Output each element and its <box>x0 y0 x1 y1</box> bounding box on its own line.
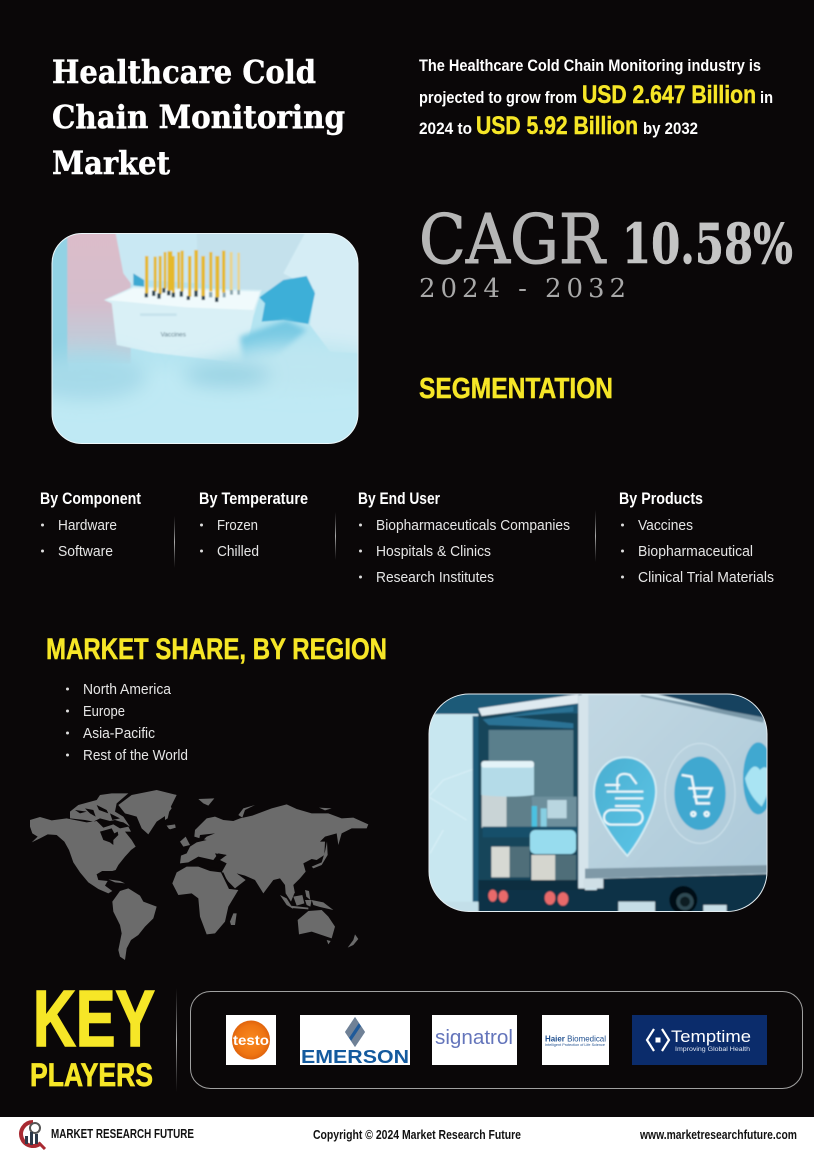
footer logo <box>21 1122 45 1149</box>
heading: key players: PLAYERS <box>30 1057 153 1093</box>
market growth summary text: 2024 to <box>419 119 472 138</box>
segment column: by component: Hardware <box>58 517 117 534</box>
footer bar: MARKET RESEARCH FUTURE <box>51 1127 194 1141</box>
logo: temptime <box>632 1015 767 1065</box>
logo: haier biomedical <box>542 1015 609 1065</box>
market growth summary text: USD 5.92 Billion <box>476 112 638 140</box>
image border: vaccines photo <box>52 234 358 444</box>
heading: segmentation: SEGMENTATION <box>419 373 613 405</box>
segment column: by temperature <box>199 489 308 560</box>
CAGR callout: 2024 - 2032 <box>419 274 626 304</box>
logo: haier biomedical: Intelligent Protection of Life Science <box>545 1043 605 1047</box>
segment column: by products <box>619 489 774 586</box>
segment column: by end user: Research Institutes <box>376 569 494 586</box>
region list: Europe <box>83 703 125 720</box>
heading: market share by region: MARKET SHARE, BY REGION <box>46 633 387 666</box>
segment column: by end user: By End User <box>358 489 440 508</box>
map: americas <box>30 790 177 960</box>
logo: haier biomedical: Haier Biomedical <box>545 1034 606 1044</box>
segment column: by temperature: Frozen <box>217 517 258 534</box>
title <box>52 53 345 182</box>
segment column: by component: By Component <box>40 489 141 508</box>
region list: Asia-Pacific <box>83 725 155 742</box>
logo: signatrol: signatrol <box>435 1027 513 1049</box>
segment column: by temperature: Chilled <box>217 543 259 560</box>
logo: temptime: Improving Global Health <box>675 1046 750 1053</box>
market growth summary text: The Healthcare Cold Chain Monitoring industry is <box>419 56 761 75</box>
segment column: by component <box>40 489 141 560</box>
map: eurasia, africa, oceania <box>165 793 368 948</box>
market growth summary text: in <box>760 88 773 107</box>
logo: emerson <box>300 1015 410 1067</box>
image: refrigerated truck <box>425 690 774 917</box>
segment column: by temperature: By Temperature <box>199 489 308 508</box>
segment column: by end user: Biopharmaceuticals Companies <box>376 517 570 534</box>
title: Healthcare Cold <box>52 53 316 91</box>
world map <box>30 790 368 960</box>
segment column: by products: By Products <box>619 489 703 508</box>
footer bar: Copyright © 2024 Market Research Future <box>313 1128 521 1142</box>
CAGR callout: CAGR <box>419 201 607 280</box>
segment column: by component: Software <box>58 543 113 560</box>
logo: signatrol <box>432 1015 517 1065</box>
segment column: by end user: Hospitals & Clinics <box>376 543 491 560</box>
logo: testo: testo <box>233 1032 269 1048</box>
segment column: by products: Clinical Trial Materials <box>638 569 774 586</box>
footer bar <box>0 1117 814 1150</box>
heading: key players: KEY <box>33 974 155 1063</box>
market growth summary text: USD 2.647 Billion <box>582 81 756 109</box>
image border: truck photo <box>429 694 767 912</box>
market growth summary text: projected to grow from <box>419 88 577 107</box>
logo: emerson: EMERSON <box>301 1047 409 1067</box>
market growth summary text <box>419 56 773 140</box>
segment column: by products: Biopharmaceutical <box>638 543 753 560</box>
image: vaccines in cold storage <box>52 234 358 443</box>
image: vaccines in cold storage: Vaccines <box>161 332 186 339</box>
region list: North America <box>83 681 172 698</box>
CAGR callout <box>419 201 793 304</box>
title: Chain Monitoring <box>52 98 345 136</box>
heading: key players <box>30 974 155 1093</box>
title: Market <box>52 144 170 182</box>
logo: temptime: Temptime <box>671 1027 751 1046</box>
region list <box>66 681 188 764</box>
region list: Rest of the World <box>83 747 188 764</box>
logo: testo <box>226 1015 276 1065</box>
market growth summary text: by 2032 <box>643 119 698 138</box>
segment column: by end user <box>358 489 570 586</box>
key players panel <box>190 992 802 1088</box>
segment column: by products: Vaccines <box>638 517 693 534</box>
